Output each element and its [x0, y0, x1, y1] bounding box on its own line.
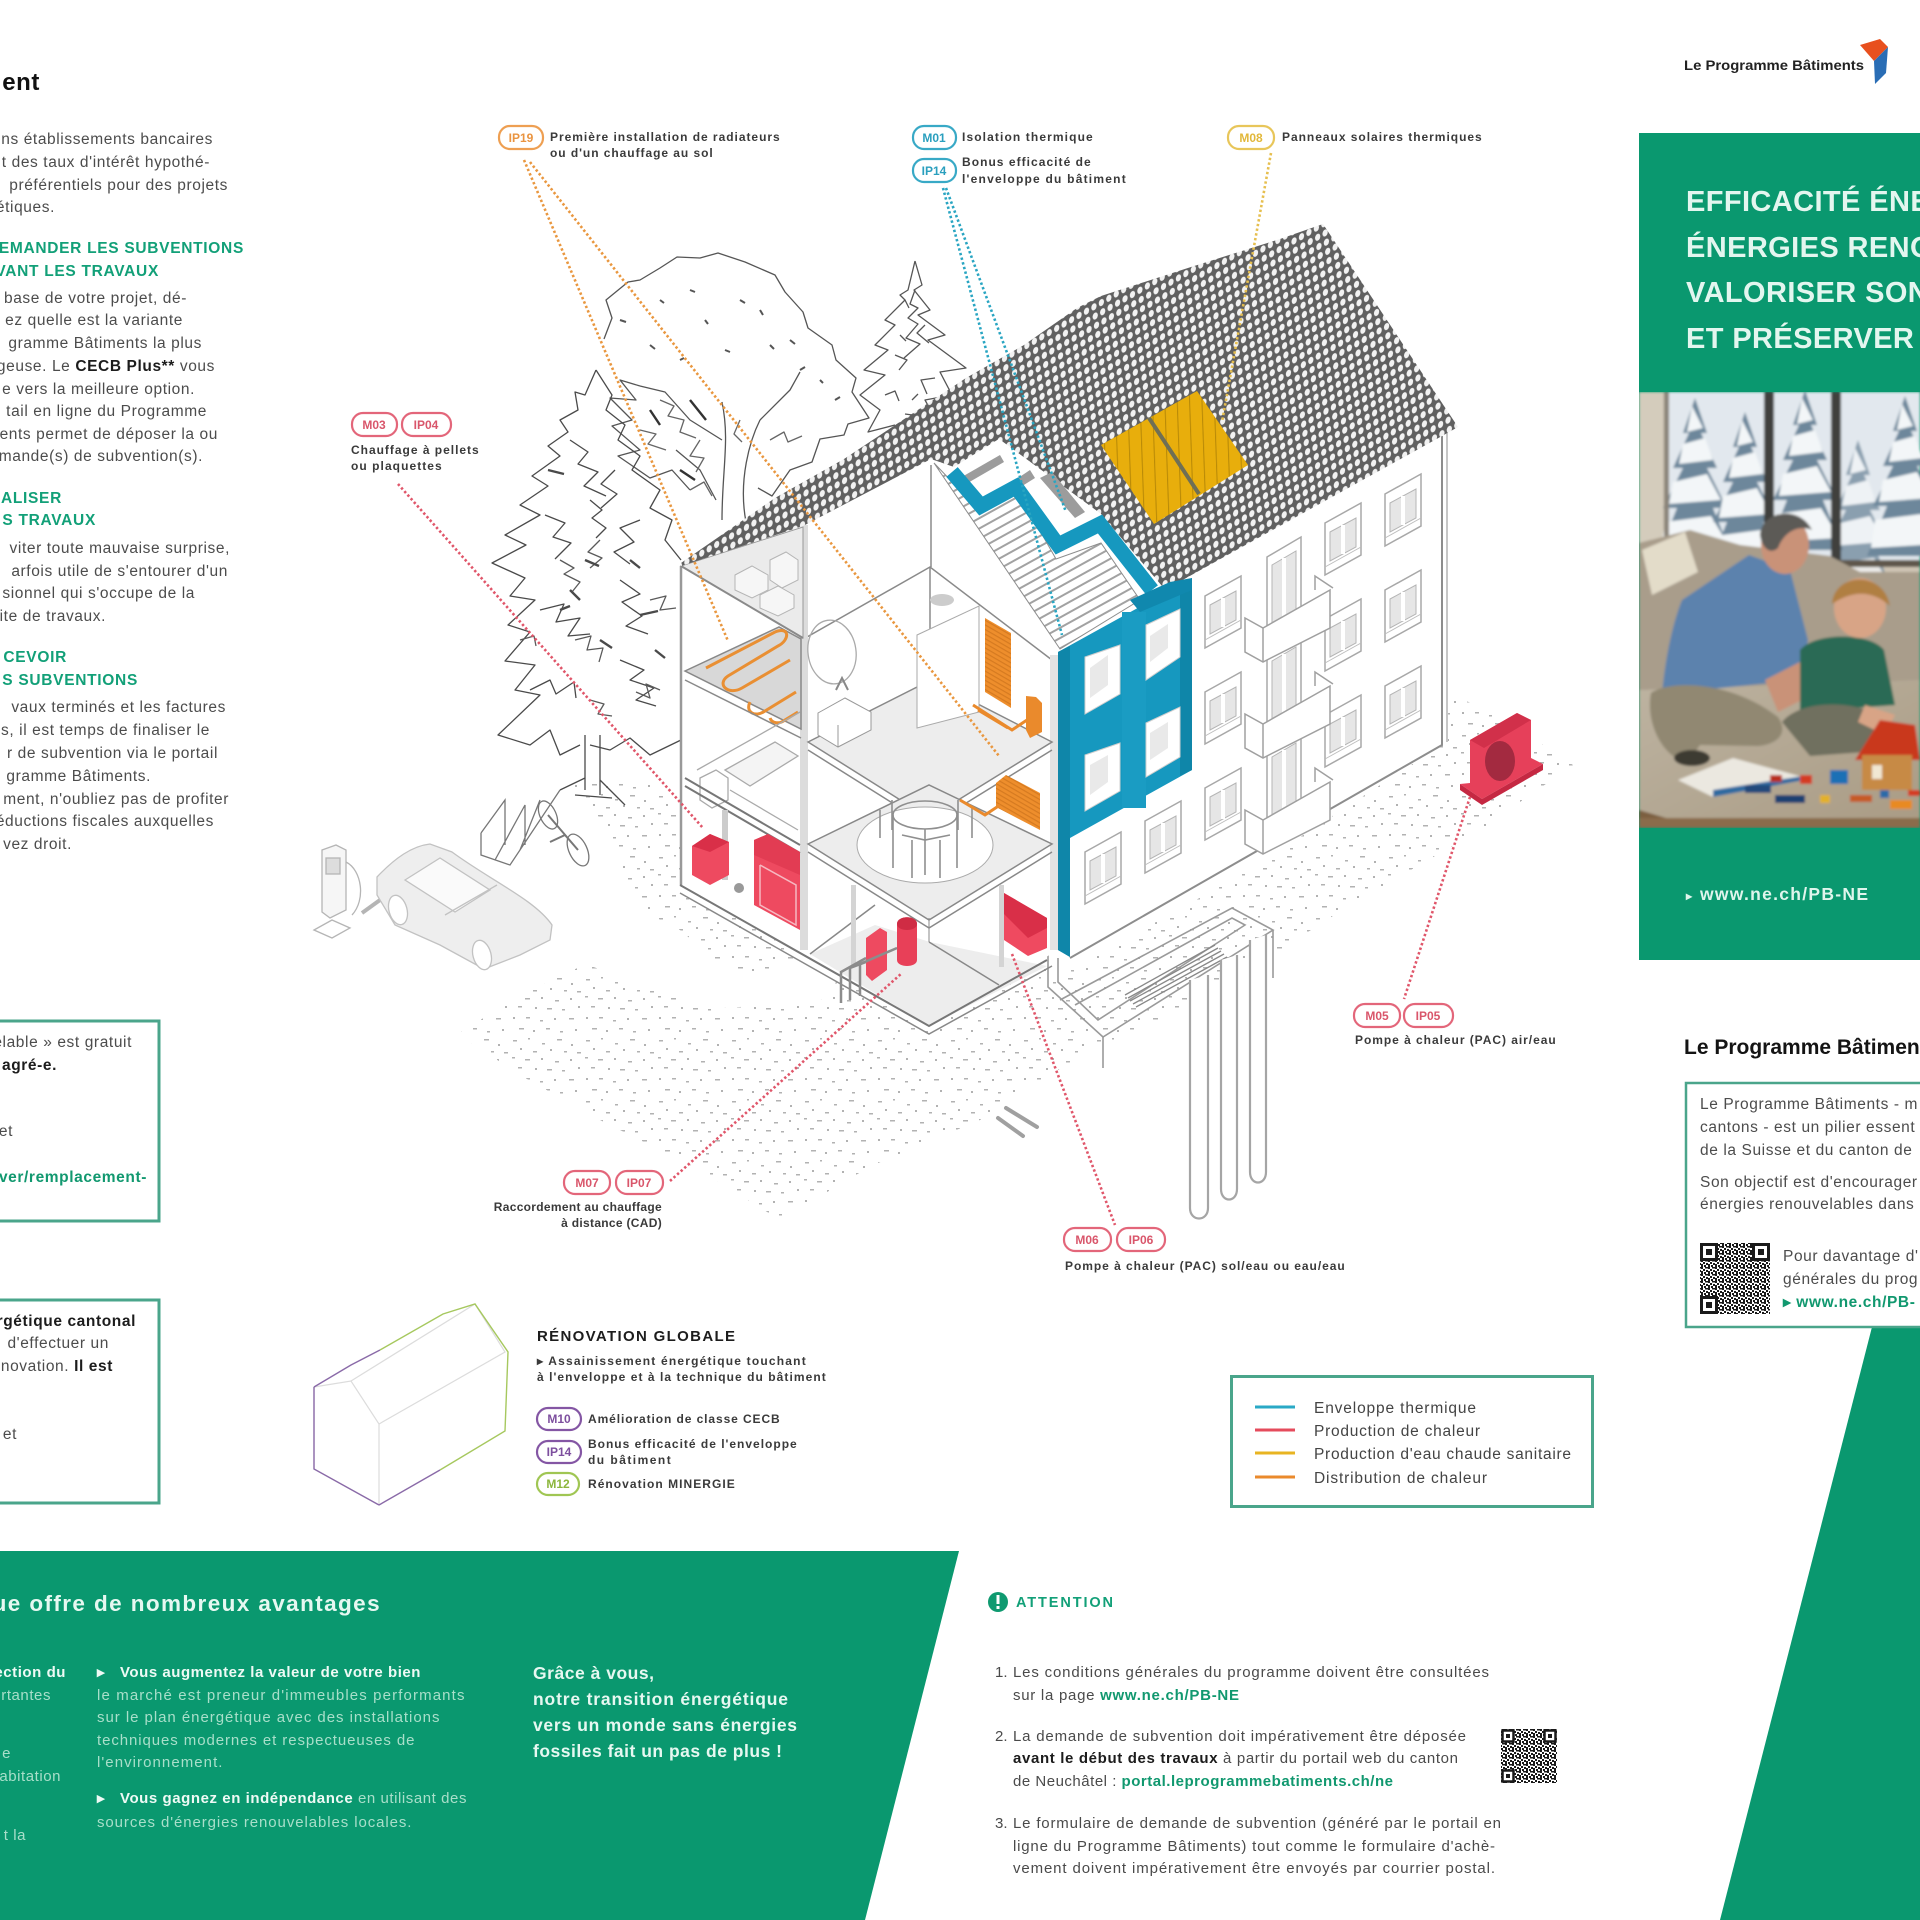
callout: grâce à vous: Grâce à vous,: [533, 1663, 654, 1683]
legend: [1232, 1376, 1592, 1506]
step heading: recevoir les subventions: CEVOIR: [3, 649, 67, 666]
illustration: tiled roof: [681, 224, 1458, 649]
callout: M08: Panneaux solaires thermiques: [1282, 130, 1482, 144]
callout: M01: [913, 126, 1093, 149]
leader: IP14 to gable insulation: [943, 188, 1062, 635]
leader: M03 to pellet boiler: [398, 484, 703, 828]
illustration: outdoor air-water heat pump: [1460, 713, 1543, 805]
cover title: ET PRÉSERVER: [1686, 321, 1914, 355]
benefits column one fragments: t la: [4, 1827, 26, 1844]
more information text: générales du prog: [1783, 1271, 1918, 1288]
benefits column one fragments: rtantes: [1, 1687, 51, 1704]
heading: attention: ATTENTION: [1016, 1595, 1113, 1611]
illustration: dining table and chairs: [880, 800, 972, 878]
step heading: recevoir les subventions: [2, 649, 138, 689]
illustration: bicycle rack: [481, 790, 593, 869]
leader: M01 to insulation: [946, 188, 1066, 512]
illustration: geothermal trench and probes: [1048, 908, 1273, 1218]
open book: [1678, 758, 1810, 797]
step text: demander les subventions: gramme Bâtiments la plus: [8, 335, 202, 352]
panel: benefits green band: [0, 1551, 959, 1920]
heading: Le Programme Bâtiments section: Le Programme Bâtimen: [1684, 1036, 1920, 1059]
panel: attention list: [988, 1592, 1557, 1877]
leader: IP19 to radiators: [530, 162, 999, 756]
callout: IP19: [499, 126, 780, 160]
callout: grâce à vous: [533, 1663, 797, 1761]
callout: IP14 thermal envelope: IP14: [922, 164, 947, 178]
step heading: réaliser les travaux: S TRAVAUX: [2, 512, 96, 529]
step text: demander les subventions: geuse. Le CECB Plus** vous: [0, 358, 215, 375]
illustration: deciduous tree: [604, 253, 869, 522]
badge: M12: [537, 1473, 579, 1495]
leader lines: [398, 153, 1470, 1225]
illustration: living room radiator: [996, 775, 1040, 830]
benefits column one fragments: abitation: [0, 1768, 61, 1785]
step text: réaliser les travaux: sionnel qui s'occupe de la: [2, 585, 195, 602]
step heading: réaliser les travaux: ALISER: [1, 490, 62, 507]
callout: IP14 thermal envelope: [913, 155, 1126, 186]
illustration: kitchen: [685, 712, 800, 853]
illustration: gravel ground: [458, 695, 1573, 1220]
more information text: [1782, 1248, 1919, 1311]
leader: M06 to ground heat pump: [1012, 954, 1115, 1225]
badge: M10: [537, 1408, 581, 1430]
step text: réaliser les travaux: viter toute mauvaise surprise,: [10, 540, 230, 557]
legend item: heat production: Production de chaleur: [1314, 1423, 1480, 1440]
badge: M12: M12: [546, 1477, 570, 1491]
step text: recevoir les subventions: vaux terminés et les factures: [11, 699, 226, 716]
legend item: thermal envelope: Enveloppe thermique: [1314, 1400, 1476, 1417]
step heading: demander les subventions: [0, 240, 244, 280]
leader: M07 to district heating: [670, 973, 902, 1181]
callout: M03 IP04: M03: [362, 418, 386, 432]
illustration: white facade: [1070, 427, 1458, 958]
callout: IP14 thermal envelope: l'enveloppe du bâtiment: [962, 172, 1126, 186]
benefits column one fragments: e: [2, 1745, 11, 1762]
boy: [1782, 578, 1895, 756]
illustration: district heating pipes: [841, 948, 897, 1003]
illustration: EV charger: [314, 845, 380, 938]
illustration: roof insulation layers: [954, 439, 1152, 580]
step text: demander les subventions: [0, 290, 218, 465]
benefits column two: sources d'énergies renouvelables locales.: [97, 1814, 412, 1831]
step text: demander les subventions: tail en ligne du Programme: [6, 403, 207, 420]
step text: recevoir les subventions: gramme Bâtiments.: [6, 768, 151, 785]
panel: CECB info box: ver/remplacement-: [0, 1169, 147, 1186]
callout: M03 IP04: Chauffage à pellets: [351, 443, 479, 457]
benefits column two: le marché est preneur d'immeubles performants: [97, 1687, 465, 1704]
callout: IP19: IP19: [509, 131, 534, 145]
panel: cantonal energy advice box: d'effectuer un: [7, 1335, 109, 1352]
more information text: ▸ www.ne.ch/PB-: [1782, 1294, 1915, 1311]
list item 2: [995, 1728, 1466, 1790]
panel: cantonal energy advice box: rgétique cantonal: [0, 1313, 136, 1330]
benefits column two: sur le plan énergétique avec des installations: [97, 1709, 440, 1726]
callout: M01: M01: [922, 131, 946, 145]
callout: M07 IP07: [494, 1171, 663, 1230]
badge: IP14: IP14: [547, 1445, 572, 1459]
toy house and bricks: [1745, 720, 1920, 809]
illustration: pellet boiler silo: [692, 834, 729, 885]
callout: M07 IP07: à distance (CAD): [561, 1216, 662, 1230]
callout: M06 IP06: Pompe à chaleur (PAC) sol/eau ou eau/eau: [1065, 1259, 1345, 1273]
sofa: [1639, 530, 1920, 700]
callout: grâce à vous: notre transition énergétique: [533, 1689, 788, 1709]
list item 1: sur la page www.ne.ch/PB-NE: [1013, 1687, 1239, 1704]
callout: M08: [1228, 126, 1482, 149]
rug: [1639, 680, 1920, 828]
list item 2: avant le début des travaux à partir du portail web du canton: [1013, 1750, 1458, 1767]
panel: cantonal energy advice box: [0, 1300, 159, 1503]
callout: M05 IP05: [1354, 1004, 1556, 1047]
about text: de la Suisse et du canton de: [1700, 1142, 1912, 1159]
benefits column two: l'environnement.: [97, 1754, 223, 1771]
callout: M03 IP04: ou plaquettes: [351, 459, 442, 473]
callout: M06 IP06: IP06: [1129, 1233, 1154, 1247]
step text: recevoir les subventions: s, il est temps de finaliser le: [1, 722, 210, 739]
about text: Le Programme Bâtiments - m: [1700, 1096, 1918, 1113]
callout: grâce à vous: vers un monde sans énergies: [533, 1715, 797, 1735]
benefits column two: techniques modernes et respectueuses de: [97, 1732, 415, 1749]
step text: réaliser les travaux: arfois utile de s'entourer d'un: [11, 563, 228, 580]
illustration: ceiling lamp: [930, 594, 954, 606]
panel: rénovation globale text: RÉNOVATION GLOBALE: [537, 1328, 735, 1345]
illustration: building section: [680, 459, 1058, 1034]
list item 3: vement doivent impérativement être envoyés par courrier postal.: [1013, 1860, 1495, 1877]
callout: M06 IP06: M06: [1075, 1233, 1099, 1247]
list item 1: [995, 1664, 1489, 1704]
list item 1: 1.: [995, 1664, 1008, 1681]
intro paragraph: ns établissements bancaires: [1, 131, 213, 148]
panel: rénovation globale text: ▸ Assainissement énergétique touchant: [536, 1354, 806, 1368]
illustration: shower door: [917, 606, 979, 728]
legend item: hot water: Production d'eau chaude sanitaire: [1314, 1446, 1571, 1463]
step text: demander les subventions: ez quelle est la variante: [5, 312, 183, 329]
panel: CECB info box: [0, 1021, 159, 1221]
benefits column two: [96, 1664, 467, 1831]
illustration: bathroom radiator: [985, 618, 1011, 708]
left text column: financing steps: [0, 69, 244, 853]
callout: IP14 thermal envelope: Bonus efficacité de: [962, 155, 1091, 169]
callout: M01: Isolation thermique: [962, 130, 1093, 144]
illustration: living room floor: [808, 775, 1052, 928]
intro paragraph: préférentiels pour des projets: [9, 177, 228, 194]
illustration: left fir tree: [492, 370, 681, 805]
illustration: windows: [1085, 474, 1421, 904]
callout: IP19: Première installation de radiateurs: [550, 130, 780, 144]
illustration: solar thermal panels: [1101, 391, 1248, 524]
step text: recevoir les subventions: ment, n'oubliez pas de profiter: [3, 791, 229, 808]
step heading: recevoir les subventions: S SUBVENTIONS: [2, 672, 138, 689]
heading: benefits: ue offre de nombreux avantages: [0, 1591, 381, 1616]
list item 3: Le formulaire de demande de subvention (généré par le portail en: [1013, 1815, 1501, 1832]
callout: M05 IP05: M05: [1365, 1009, 1389, 1023]
step heading: réaliser les travaux: [1, 490, 96, 529]
list item 2: 2.: [995, 1728, 1008, 1745]
list item 2: La demande de subvention doit impérativement être déposée: [1013, 1728, 1466, 1745]
icon: exclamation: [988, 1592, 1008, 1612]
window with snowy firs: [1664, 392, 1920, 564]
heading fragment: ent: [2, 69, 40, 96]
illustration: insulated facade in blue: [1058, 578, 1192, 957]
panel: cantonal energy advice box: et: [3, 1426, 17, 1443]
list item 2: de Neuchâtel : portal.leprogrammebatiments.ch/ne: [1013, 1773, 1393, 1790]
illustration: electric car: [377, 844, 552, 972]
benefits column one fragments: [0, 1664, 66, 1844]
callout: M05 IP05: Pompe à chaleur (PAC) air/eau: [1355, 1033, 1556, 1047]
panel: rénovation globale text: [536, 1328, 826, 1495]
illustration: pellet boiler: [754, 834, 800, 930]
logo: Le Programme Bâtiments: [1684, 39, 1888, 84]
step text: demander les subventions: base de votre projet, dé-: [4, 290, 187, 307]
man: [1650, 514, 1812, 766]
panel: rénovation globale text: Amélioration de classe CECB: [588, 1412, 780, 1426]
step text: recevoir les subventions: [0, 699, 229, 853]
callout: M03 IP04: IP04: [414, 418, 439, 432]
panel: about the programme: [1686, 1083, 1920, 1327]
badge: IP14: [537, 1441, 581, 1463]
illustration: attic with stored boxes: [681, 527, 803, 638]
illustration: spare pipes on ground: [998, 1108, 1037, 1136]
panel: rénovation globale text: du bâtiment: [588, 1453, 671, 1467]
logo: Le Programme Bâtiments: Le Programme Bâtiments: [1684, 58, 1864, 73]
illustration: windows in insulated zone: [1085, 609, 1180, 811]
about text: Son objectif est d'encourager: [1700, 1174, 1918, 1191]
illustration: indoor heat pump: [1004, 893, 1047, 956]
more information text: Pour davantage d': [1783, 1248, 1919, 1265]
illustration: balconies: [1245, 576, 1333, 854]
about text: [1700, 1096, 1918, 1213]
panel: green triangle right: [1720, 1327, 1920, 1920]
leader: M08 to solar panels: [1222, 153, 1271, 422]
callout: M07 IP07: M07: [575, 1176, 599, 1190]
callout: M08: M08: [1239, 131, 1263, 145]
callout: M03 IP04: [351, 413, 479, 473]
illustration: district heating substation: [841, 917, 917, 1003]
benefits column two: ▸: [96, 1664, 106, 1681]
illustration: bathroom floor: [804, 594, 1052, 826]
illustration: ground probes: [1190, 935, 1266, 1218]
step heading: demander les subventions: EMANDER LES SUBVENTIONS: [0, 240, 244, 257]
step text: recevoir les subventions: éductions fiscales auxquelles: [0, 813, 214, 830]
about text: énergies renouvelables dans: [1700, 1196, 1914, 1213]
panel: rénovation globale text: à l'enveloppe et à la technique du bâtiment: [537, 1370, 826, 1384]
benefits column two: Vous augmentez la valeur de votre bien: [120, 1664, 421, 1681]
benefits column two: Vous gagnez en indépendance en utilisant des: [120, 1790, 467, 1807]
illustration: right fir tree: [860, 261, 966, 432]
callout: M06 IP06: [1064, 1228, 1345, 1273]
intro paragraph: t des taux d'intérêt hypothé-: [2, 154, 210, 171]
callout: IP19: ou d'un chauffage au sol: [550, 146, 713, 160]
step text: demander les subventions: ents permet de déposer la ou: [0, 426, 218, 443]
step text: demander les subventions: e vers la meilleure option.: [2, 381, 195, 398]
list item 3: [995, 1815, 1501, 1877]
illustration: balcony doors: [1267, 537, 1301, 831]
cover title: [1686, 184, 1920, 355]
step text: réaliser les travaux: ite de travaux.: [0, 608, 106, 625]
illustration: underfloor heating: [685, 627, 801, 738]
cover link: www.ne.ch/PB-NE: [1699, 884, 1868, 904]
panel: rénovation globale text: Rénovation MINERGIE: [588, 1477, 735, 1491]
panel: cover title block: [1639, 133, 1920, 960]
leader: IP19 to underfloor heating: [524, 160, 728, 641]
callout: M07 IP07: IP07: [627, 1176, 652, 1190]
cover link: ▸: [1685, 889, 1693, 903]
illustration: collector pipes: [1125, 945, 1227, 1007]
panel: rénovation globale text: Bonus efficacité de l'enveloppe: [588, 1437, 797, 1451]
badge: M10: M10: [547, 1412, 571, 1426]
list item 1: Les conditions générales du programme doivent être consultées: [1013, 1664, 1489, 1681]
leader: M05 to air heat pump: [1404, 797, 1470, 999]
QR code: portal: [1501, 1729, 1557, 1783]
legend item: heat distribution: Distribution de chaleur: [1314, 1470, 1487, 1487]
illustration: back and interior walls: [680, 459, 1058, 1026]
step text: demander les subventions: mande(s) de subvention(s).: [0, 448, 203, 465]
intro paragraph: [0, 131, 228, 216]
list item 3: ligne du Programme Bâtiments) tout comme le formulaire d'achè-: [1013, 1838, 1495, 1855]
step text: recevoir les subventions: r de subvention via le portail: [7, 745, 218, 762]
step text: réaliser les travaux: [0, 540, 230, 625]
callout: M05 IP05: IP05: [1416, 1009, 1441, 1023]
callout: M07 IP07: Raccordement au chauffage: [494, 1200, 662, 1214]
QR code: programme: [1700, 1243, 1770, 1314]
about text: cantons - est un pilier essent: [1700, 1119, 1915, 1136]
step text: recevoir les subventions: vez droit.: [3, 836, 72, 853]
step heading: demander les subventions: VANT LES TRAVAUX: [0, 263, 159, 280]
benefits column two: ▸: [96, 1790, 106, 1807]
callout: grâce à vous: fossiles fait un pas de plus !: [533, 1741, 782, 1761]
panel: cantonal energy advice box: novation. Il est: [1, 1358, 113, 1375]
illustration: small house global renovation: [314, 1304, 508, 1505]
photo: father and son building a toy house: [1639, 390, 1920, 828]
illustration: ground floor slab: [680, 810, 1052, 1034]
illustration: sink and mirror: [804, 617, 860, 687]
list item 3: 3.: [995, 1815, 1008, 1832]
